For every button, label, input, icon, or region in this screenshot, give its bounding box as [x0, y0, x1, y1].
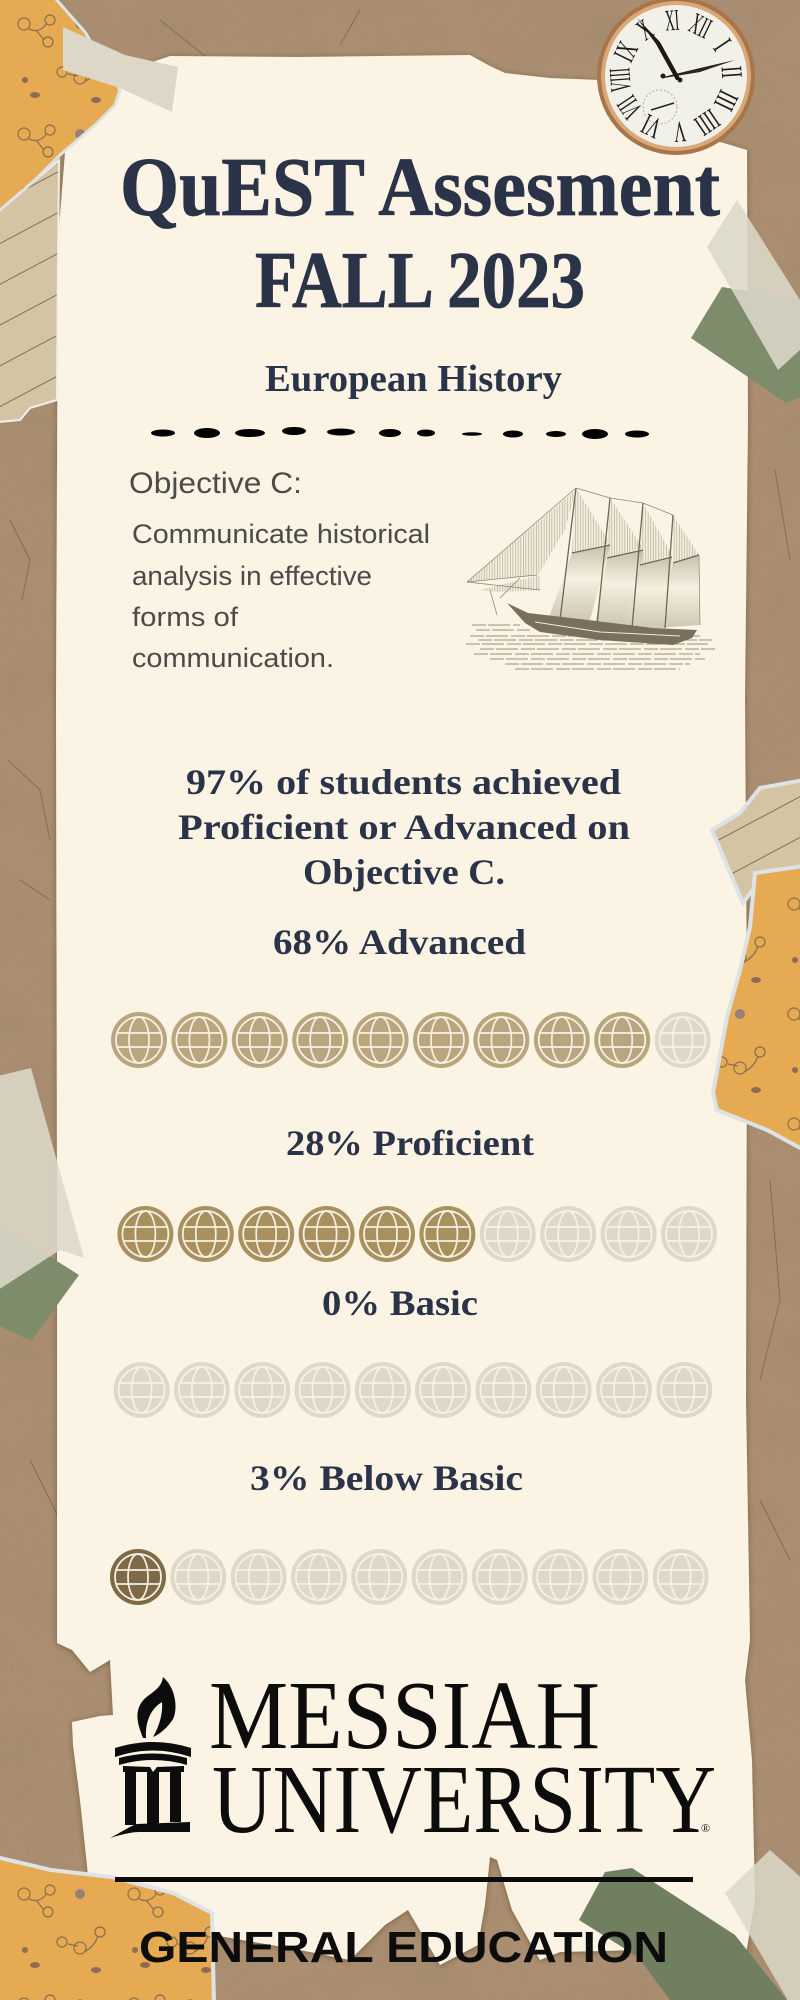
- headline statistic: [178, 762, 630, 892]
- icon: antique clock: IIII: [689, 102, 725, 142]
- panel: green scrap, top right: [691, 287, 800, 403]
- brush dash divider: [151, 427, 649, 439]
- panel: notebook scrap, top left: [0, 160, 59, 422]
- icon: antique clock: V: [673, 114, 687, 148]
- subtitle: European History: European History: [265, 358, 562, 400]
- panel: notebook scrap, right middle: [712, 780, 800, 903]
- icon: antique clock: VI: [636, 107, 667, 145]
- headline statistic: Proficient or Advanced on: [178, 807, 630, 847]
- icon: antique clock: IX: [607, 36, 645, 67]
- pictogram row: Below Basic: [110, 1549, 709, 1605]
- headline statistic: Objective C.: [303, 852, 505, 892]
- tape, bottom right: [725, 1850, 800, 2000]
- icon: antique clock: III: [707, 85, 745, 116]
- label: 0% Basic: 0% Basic: [322, 1283, 478, 1323]
- title: FALL 2023: [255, 237, 585, 325]
- icon: antique clock: VII: [611, 90, 649, 125]
- logo wordmark: MESSIAH: [209, 1662, 600, 1770]
- icon: antique clock: XII: [684, 7, 717, 45]
- logo wordmark: [209, 1662, 716, 1853]
- footer: General Education: GENERAL EDUCATION: [139, 1923, 668, 1972]
- objective description: communication.: [132, 643, 334, 673]
- label: 3% Below Basic: 3% Below Basic: [250, 1458, 523, 1498]
- icon: antique clock: II: [714, 65, 748, 79]
- icon: antique clock: X: [631, 13, 659, 47]
- logo wordmark: ®: [701, 1821, 710, 1835]
- icon: antique clock: XI: [664, 4, 680, 38]
- icon: antique clock: VIII: [603, 67, 638, 93]
- icon: Messiah University torch and pillar: [110, 1677, 191, 1838]
- icon: antique clock: [597, 0, 755, 155]
- title: QuEST Assesment: [120, 141, 720, 234]
- objective description: [132, 519, 430, 673]
- illustration: sailing ship: [466, 488, 715, 669]
- pictogram row: Proficient: [117, 1206, 717, 1262]
- panel: yellow patterned scrap, top left: [0, 0, 120, 213]
- objective heading: Objective C:: [129, 467, 302, 500]
- objective description: forms of: [132, 602, 239, 632]
- label: 68% Advanced: 68% Advanced: [273, 922, 526, 962]
- panel: green scrap, bottom right: [579, 1868, 790, 2000]
- logo wordmark: UNIVERSITY: [212, 1746, 716, 1853]
- headline statistic: 97% of students achieved: [186, 762, 621, 802]
- objective description: analysis in effective: [132, 561, 372, 591]
- label: 28% Proficient: 28% Proficient: [286, 1123, 534, 1163]
- title: [120, 141, 720, 325]
- panel: yellow patterned scrap, right middle: [713, 866, 800, 1150]
- footer rule: [115, 1877, 693, 1882]
- panel: yellow patterned scrap, bottom left: [0, 1857, 214, 2000]
- icon: antique clock: I: [707, 33, 737, 57]
- tape, top right: [707, 200, 800, 370]
- pictogram row: Advanced: [111, 1012, 711, 1068]
- pictogram row: Basic: [114, 1362, 712, 1418]
- tape, top left: [63, 27, 178, 112]
- objective description: Communicate historical: [132, 519, 430, 549]
- tape and green scrap, left middle: [0, 1068, 84, 1341]
